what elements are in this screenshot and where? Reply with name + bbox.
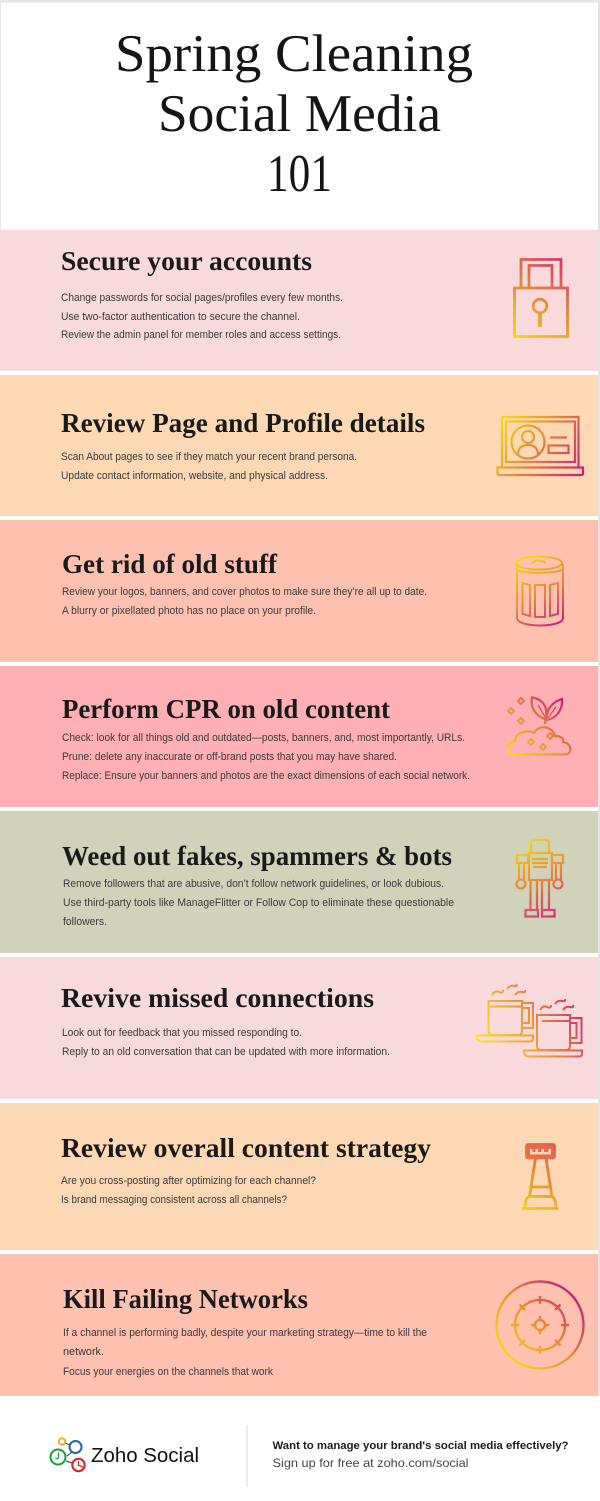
call to action: Want to manage your brand's social media effectively? [272, 1440, 569, 1452]
call to action [272, 1440, 569, 1470]
text: old stuff [62, 586, 427, 617]
icon: trash can [516, 556, 563, 626]
icon: chess rook [522, 1144, 558, 1208]
icon: padlock [514, 260, 568, 336]
text: old stuff: Review your logos, banners, and cover photos to make sure they’re all up to date. [62, 586, 427, 598]
call to action: Sign up for free at zoho.com/social [272, 1456, 468, 1470]
text: kill [63, 1327, 427, 1378]
logo: zoho social: Zoho Social [91, 1445, 199, 1467]
heading: strategy: Review overall content strategy [61, 1133, 431, 1163]
heading: cpr: Perform CPR on old content [62, 694, 390, 724]
text: kill: network. [63, 1346, 104, 1358]
text: kill: If a channel is performing badly, despite your marketing strategy—time to kill the [63, 1327, 427, 1339]
title: 101 [267, 145, 332, 203]
icon: target [496, 1282, 584, 1368]
logo: zoho social [50, 1438, 199, 1471]
text: fakes: Use third-party tools like ManageFlitter or Follow Cop to eliminate these questionable [63, 897, 454, 909]
text: fakes [63, 878, 454, 928]
text: kill: Focus your energies on the channels that work [63, 1366, 273, 1378]
text: strategy [61, 1175, 316, 1206]
heading: secure: Secure your accounts [61, 246, 312, 276]
text: revive: Reply to an old conversation that can be updated with more information. [62, 1046, 390, 1058]
panel: kill failing networks [0, 1254, 598, 1396]
heading: revive: Revive missed connections [61, 983, 374, 1013]
panel: revive missed connections [0, 957, 598, 1099]
heading: kill: Kill Failing Networks [63, 1284, 308, 1314]
text: cpr [62, 732, 470, 782]
text: fakes: Remove followers that are abusive, don’t follow network guidelines, or look dubious. [63, 878, 444, 890]
title: Spring Cleaning [115, 25, 473, 83]
text: secure [61, 292, 343, 341]
text: strategy: Are you cross-posting after optimizing for each channel? [61, 1175, 316, 1187]
panel: perform cpr on old content [0, 666, 598, 807]
text: review page: Update contact information, website, and physical address. [61, 470, 328, 482]
icon: plant [508, 698, 570, 754]
text: review page [61, 451, 357, 482]
icon: coffee cups [477, 984, 582, 1056]
panel: secure your accounts [0, 230, 598, 371]
text: secure: Review the admin panel for member roles and access settings. [61, 329, 341, 341]
text: cpr: Prune: delete any inaccurate or off-brand posts that you may have shared. [62, 751, 397, 763]
panel: review overall content strategy [0, 1103, 598, 1250]
text: cpr: Replace: Ensure your banners and photos are the exact dimensions of each social network. [62, 770, 470, 782]
panel: get rid of old stuff [0, 520, 598, 662]
text: revive: Look out for feedback that you missed responding to. [62, 1027, 302, 1039]
text: secure: Use two-factor authentication to secure the channel. [61, 311, 300, 323]
text: strategy: Is brand messaging consistent across all channels? [61, 1194, 287, 1206]
icon: laptop profile [498, 417, 583, 475]
icon: robot [516, 840, 563, 916]
title [115, 25, 473, 203]
text: cpr: Check: look for all things old and outdated—posts, banners, and, most importantly, URLs. [62, 732, 465, 744]
text: revive [62, 1027, 390, 1058]
panel: weed out fakes [0, 811, 598, 953]
heading: review page: Review Page and Profile details [61, 408, 425, 438]
text: review page: Scan About pages to see if they match your recent brand persona. [61, 451, 357, 463]
title: Social Media [158, 85, 441, 143]
heading: old stuff: Get rid of old stuff [62, 549, 278, 579]
panel: review page and profile details [0, 375, 598, 516]
text: fakes: followers. [63, 916, 107, 928]
heading: fakes: Weed out fakes, spammers & bots [62, 841, 452, 871]
text: old stuff: A blurry or pixellated photo has no place on your profile. [62, 605, 316, 617]
text: secure: Change passwords for social pages/profiles every few months. [61, 292, 343, 304]
panel: footer [50, 1425, 569, 1487]
